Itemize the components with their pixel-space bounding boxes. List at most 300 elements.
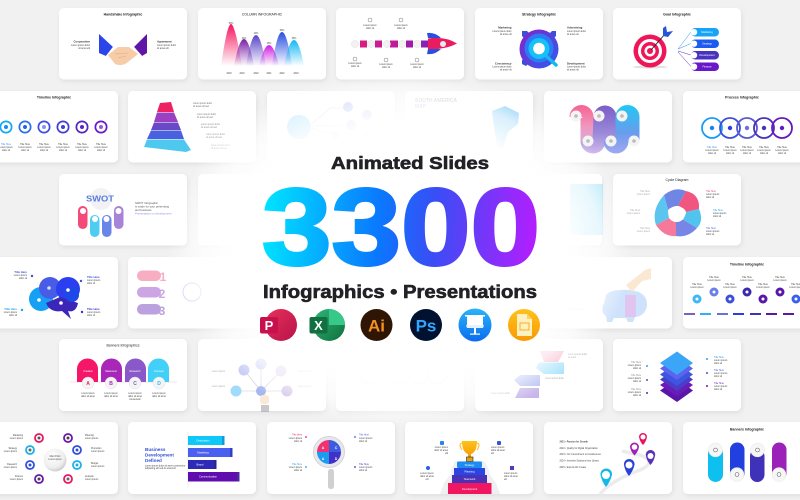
- panel: rocket timeline: [336, 8, 464, 80]
- panel: magnifier infographic: dolor sit: [359, 440, 367, 443]
- icon row: [260, 308, 540, 342]
- panel: banners infographic: D: [157, 381, 161, 387]
- panel: roadmap pins: [544, 422, 672, 494]
- panel: pyramid infographic: Lorem ipsum dolor: [193, 102, 212, 105]
- panel: banners infographic: Lorem ipsum: [104, 392, 118, 395]
- panel: trophy stairs: elit: [491, 452, 494, 455]
- panel: cycle diagram: [613, 174, 741, 246]
- panel: handshake infographic: sit amet elit: [157, 47, 169, 50]
- panel: strategy infographic: Lorem ipsum dolor: [567, 66, 586, 68]
- panel: radial ball infographic: Lorem ipsum: [4, 450, 17, 453]
- panel: process infographic: Lorem ipsum: [757, 149, 771, 152]
- panel: rocket timeline: dolor sit: [351, 65, 359, 68]
- panel: layers infographic: Title Here: [714, 356, 725, 359]
- panel: radial ball infographic: Lorem ipsum: [10, 478, 23, 481]
- panel: banners infographic: dolor sit amet: [104, 395, 118, 398]
- panel: south america map: MAP: [415, 104, 427, 110]
- panel: banners infographic: Lorem ipsum: [152, 392, 166, 395]
- panel: banners infographic: Banners Infographics: [106, 344, 140, 348]
- panel: column infographic: [198, 8, 326, 80]
- icon: Photoshop: [410, 309, 442, 341]
- panel: timeline infographic right: Timeline Infographic: [730, 262, 764, 266]
- panel: trophy stairs: dolor sit amet: [491, 449, 505, 452]
- panel: timeline infographic right: Title Here: [742, 276, 753, 279]
- panel: column infographic: 2022: [279, 73, 285, 75]
- panel: rocket timeline: Lorem ipsum: [394, 24, 408, 27]
- panel: banners infographic: Lorem ipsum: [128, 392, 142, 395]
- panel: trophy stairs: dolor sit amet: [434, 449, 448, 452]
- panel: banners infographic: dolor sit amet: [81, 395, 95, 398]
- panel: banners infographic: [59, 339, 187, 411]
- panel: column infographic: 35%: [292, 38, 296, 40]
- panel: pyramid infographic: Lorem ipsum dolor: [211, 144, 230, 147]
- panel: arrows infographic: Lorem ipsum dolor: [491, 392, 510, 395]
- panel: timeline infographic left: Lorem ipsum: [94, 146, 108, 149]
- panel: radial ball infographic: Lorem ipsum: [85, 437, 98, 440]
- panel: radial ball infographic: Lorem ipsum: [10, 437, 23, 440]
- panel: banners infographic: dolor sit amet: [152, 395, 166, 398]
- panel: network diagram: [267, 91, 395, 162]
- panel: timeline infographic left: dolor sit: [97, 149, 105, 152]
- panel: strategy infographic: Advertising: [567, 26, 583, 30]
- panel: magnifier infographic: Lorem ipsum: [359, 466, 372, 469]
- panel: brain infographic: Lorem ipsum: [87, 279, 100, 282]
- panel: strategy infographic: Consistency: [495, 62, 512, 66]
- panel: goal infographic: Development: [699, 53, 715, 57]
- panel: strategy infographic: Marketing: [498, 26, 512, 30]
- panel: timeline infographic left: dolor sit: [2, 149, 10, 152]
- panel: trophy stairs: Teamwork: [464, 477, 476, 481]
- panel: rocket timeline: dolor sit: [397, 27, 405, 30]
- panel: SWOT: and business: [135, 208, 152, 212]
- panel: timeline infographic right: Title Here: [725, 283, 736, 286]
- big number 3300: 3300: [262, 166, 540, 288]
- panel: business development: Defined: [145, 458, 162, 463]
- panel: radial ball infographic: Promotion: [91, 447, 102, 450]
- panel: strategy infographic: sit amet elit: [500, 68, 512, 72]
- panel: magnifier infographic: A: [322, 446, 325, 450]
- panel: banners infographic: C: [133, 381, 137, 387]
- panel: magnifier infographic: C: [335, 446, 338, 450]
- panel: strategy infographic: sit amet elit: [567, 68, 579, 72]
- panel: timeline infographic right: Lorem ipsum: [723, 286, 737, 289]
- panel: trophy stairs: Lorem ipsum: [504, 472, 517, 475]
- panel: cycle diagram: dolor sit: [706, 233, 714, 236]
- panel: trophy stairs: [405, 422, 533, 494]
- panel: timeline infographic left: Lorem ipsum: [56, 146, 70, 149]
- panel: faded ring chain: [336, 339, 464, 411]
- panel: timeline infographic left: Title Here: [58, 143, 69, 146]
- panel: layers infographic: Lorem ipsum: [714, 359, 727, 362]
- panel: pyramid infographic: Lorem ipsum dolor: [201, 123, 220, 126]
- panel: business development: Development: [145, 452, 174, 458]
- panel: radial ball infographic: Planning: [85, 435, 95, 437]
- panel: banners infographic: Research: [129, 369, 141, 373]
- panel: process infographic: Title Here: [707, 146, 718, 149]
- panel: radial ball infographic: Finance: [15, 476, 24, 478]
- panel: radial ball infographic: [0, 422, 118, 494]
- panel: brain infographic: [0, 257, 118, 328]
- panel: banners infographic: Statement: [105, 369, 117, 373]
- panel: trophy stairs: Lorem ipsum: [420, 472, 434, 475]
- panel: banners infographic: dolor sit amet: [128, 395, 142, 398]
- panel: cycle diagram: Title Here: [706, 227, 717, 230]
- panel: piggy bank: [544, 257, 672, 328]
- panel: trophy stairs: elit: [504, 478, 507, 481]
- icon: Excel: [310, 309, 345, 341]
- panel: process infographic: Process Infographic: [725, 96, 759, 100]
- panel: rocket timeline: dolor sit: [382, 66, 390, 69]
- panel: SWOT: [59, 174, 187, 246]
- panel: numbered list: 2: [159, 287, 166, 301]
- panel: timeline infographic left: dolor sit: [21, 149, 29, 152]
- panel: column infographic: 2021: [266, 73, 272, 75]
- panel: column infographic: 2020: [253, 73, 259, 75]
- panel: rocket timeline: dolor sit: [413, 66, 421, 69]
- panel: trophy stairs: Strategy: [465, 463, 475, 467]
- panel: layers infographic: [613, 339, 741, 411]
- panel: pyramid infographic: sit amet elit sed: [206, 136, 223, 139]
- panel: strategy infographic: Development: [567, 62, 585, 66]
- icon: Photoshop: Ps: [416, 316, 436, 336]
- panel: process infographic: dolor sit: [760, 152, 768, 155]
- panel: SWOT: SWOT: [86, 194, 114, 204]
- panel: trophy stairs: elit: [426, 478, 429, 481]
- panel: magnifier infographic: Title Here: [292, 463, 303, 466]
- heading: Animated Slides: Animated Slides: [331, 153, 489, 173]
- central white glow: [168, 72, 632, 428]
- panel: numbered list: 3: [159, 304, 166, 318]
- panel: handshake infographic: Agreement: [157, 40, 172, 44]
- panel: banners infographic: Concept: [154, 369, 164, 373]
- panel: strategy infographic: [475, 8, 603, 80]
- panel: cycle diagram: Lorem ipsum: [706, 193, 719, 196]
- panel: radial ball infographic: Budget: [91, 462, 99, 465]
- panel: cycle diagram: Lorem ipsum: [706, 230, 719, 233]
- panel: magnifier infographic: [267, 422, 395, 494]
- panel: column infographic: 25%: [267, 43, 271, 45]
- panel: strategy infographic: Lorem ipsum dolor: [492, 30, 512, 33]
- panel: banners infographic: Lorem ipsum: [81, 392, 95, 395]
- panel: brain infographic: Title Here: [14, 270, 27, 274]
- panel: goal infographic: Finance: [702, 64, 712, 68]
- panel: goal infographic: Goal Infographic: [663, 12, 691, 16]
- panel: brain infographic: Title Here: [87, 307, 100, 311]
- panel: timeline infographic left: Timeline Infographic: [37, 96, 71, 100]
- panel: layers infographic: Lorem ipsum: [714, 385, 727, 388]
- panel: pyramid infographic: Lorem ipsum dolor: [206, 133, 225, 136]
- panel: goal infographic: Strategy: [702, 42, 713, 46]
- panel: south america map: [405, 91, 533, 162]
- panel: cycle diagram: Lorem ipsum: [637, 193, 650, 196]
- panel: business development: Communication: [199, 474, 218, 478]
- panel: radial ball infographic: Research: [7, 463, 18, 466]
- panel: layers infographic: Lorem ipsum: [714, 372, 727, 375]
- icon: PowerPoint: P: [265, 318, 274, 333]
- panel: process infographic: Lorem ipsum: [740, 149, 754, 152]
- panel: rocket timeline: Lorem ipsum: [363, 24, 377, 27]
- panel: banners infographic: B: [109, 381, 113, 387]
- panel: column infographic: 2018: [226, 73, 232, 75]
- panel: timeline infographic left: Lorem ipsum: [18, 146, 32, 149]
- panel: process infographic: dolor sit: [743, 152, 751, 155]
- panel: process infographic: dolor sit: [726, 152, 734, 155]
- panel: strategy infographic: sit amet elit: [567, 33, 579, 36]
- panel: cycle diagram: Lorem ipsum: [627, 212, 640, 215]
- panel: process infographic: Title Here: [777, 146, 788, 149]
- panel: timeline infographic left: dolor sit: [40, 149, 48, 152]
- panel: business development: Description: [197, 438, 210, 442]
- panel: brain infographic: dolor sit: [87, 282, 95, 285]
- panel: numbered list: [128, 257, 256, 328]
- panel: magnifier infographic: Lorem ipsum: [289, 437, 302, 440]
- panel: column infographic: 32%: [242, 38, 246, 40]
- panel: blank faded slide: [198, 174, 326, 246]
- panel: hand network: [198, 339, 326, 412]
- panel: rocket timeline: Lorem ipsum: [410, 63, 424, 66]
- panel: strategy infographic: sit amet elit: [500, 33, 512, 36]
- panel: radial ball infographic: Strategy: [8, 447, 18, 450]
- panel: timeline infographic left: Title Here: [77, 143, 88, 146]
- panel: timeline infographic left: Lorem ipsum: [75, 146, 89, 149]
- icon: Illustrator: [360, 309, 392, 341]
- panel: roadmap pins: 2021 • Passion for Growth: [560, 440, 588, 444]
- panel: banners infographic right: [683, 422, 800, 494]
- panel: business development: [128, 422, 256, 494]
- panel: process infographic: Title Here: [742, 146, 753, 149]
- panel: roadmap pins: 2022 • Quality for Digital Organization: [560, 447, 599, 450]
- panel: layers infographic: Title Here: [631, 374, 642, 377]
- panel: arrows infographic: sit amet: [568, 356, 576, 359]
- panel: trophy stairs: elit: [445, 452, 448, 455]
- panel: column infographic: 50%: [280, 30, 284, 32]
- panel: banners infographic right: Banners Infographic: [730, 428, 764, 432]
- panel: handshake infographic: Lorem ipsum dolor: [71, 44, 90, 47]
- panel: trophy stairs: Planning: [464, 470, 475, 474]
- panel: timeline infographic right: Lorem ipsum: [740, 279, 754, 282]
- panel: cycle diagram: dolor sit: [706, 196, 714, 199]
- panel: hand network: Lorem ipsum: [298, 370, 311, 373]
- panel: cycle diagram: dolor sit: [713, 215, 721, 218]
- panel: timeline infographic right: Title Here: [709, 276, 720, 279]
- panel: process infographic: Lorem ipsum: [705, 149, 719, 152]
- panel: process infographic: dolor sit: [778, 152, 786, 155]
- panel: layers infographic: Title Here: [714, 369, 725, 372]
- panel: brain infographic: dolor sit: [19, 277, 27, 280]
- panel: timeline infographic left: Lorem ipsum: [37, 146, 51, 149]
- panel: cycle diagram: Title Here: [706, 190, 717, 193]
- panel: timeline infographic left: Title Here: [20, 143, 31, 146]
- panel: magnifier infographic: dolor sit: [294, 440, 302, 443]
- icon: Excel: X: [314, 318, 323, 333]
- panel: radial ball infographic: Lorem ipsum: [85, 478, 98, 481]
- panel: timeline infographic left: Title Here: [39, 143, 50, 146]
- panel: goal infographic: Marketing: [701, 30, 713, 34]
- panel: timeline infographic right: Lorem ipsum: [773, 279, 787, 282]
- panel: layers infographic: dolor sit: [714, 362, 722, 365]
- panel: radial ball infographic: Lorem ipsum: [91, 450, 104, 453]
- panel: handshake infographic: Lorem ipsum dolor: [157, 44, 176, 47]
- panel: rocket timeline: Lorem ipsum: [379, 63, 393, 66]
- panel: hand network: Lorem ipsum: [298, 385, 311, 388]
- panel: cycle diagram: Title Here: [640, 190, 651, 193]
- panel: arrows infographic: Lorem ipsum dolor: [545, 377, 564, 380]
- panel: handshake infographic: Cooperation: [74, 40, 90, 44]
- panel: layers infographic: Lorem ipsum: [628, 364, 641, 367]
- panel: arrows infographic: Lorem ipsum dolor: [568, 353, 587, 356]
- panel: brain infographic: Lorem ipsum: [87, 311, 100, 314]
- panel: process infographic: dolor sit: [708, 152, 716, 155]
- panel: numbered list: 1: [160, 270, 167, 284]
- panel: timeline infographic left: dolor sit: [78, 149, 86, 152]
- panel: business development: Marketing: [197, 450, 209, 454]
- panel: handshake infographic: sit amet elit: [78, 47, 90, 50]
- panel: trophy stairs: Lorem ipsum: [491, 446, 504, 449]
- panel: pyramid infographic: [128, 91, 256, 162]
- panel: roadmap pins: 2024 • Inventive Solutions from Library: [560, 460, 600, 462]
- panel: process infographic: [683, 91, 800, 162]
- panel: radial ball infographic: Main Point: [50, 455, 61, 458]
- panel: faded bar slide: [544, 174, 603, 246]
- panel: hand network: Lorem ipsum: [212, 370, 225, 373]
- panel: piggy bank: Lorem ipsum dolor: [565, 308, 584, 311]
- panel: strategy infographic: Lorem ipsum dolor: [567, 30, 586, 33]
- panel: layers infographic: Title Here: [714, 382, 725, 385]
- panel: roadmap pins: 2023 • Our Commitment to Creativeness: [560, 453, 602, 456]
- panel: timeline infographic left: Title Here: [1, 143, 12, 146]
- panel: magnifier infographic: dolor sit: [294, 469, 302, 472]
- panel: radial ball infographic: Lorem ipsum: [4, 466, 17, 469]
- panel: layers infographic: dolor sit: [714, 375, 722, 378]
- panel: column infographic: 40%: [254, 33, 258, 35]
- panel: cycle diagram: Lorem ipsum: [713, 212, 726, 215]
- panel: timeline infographic right: Title Here: [692, 283, 703, 286]
- panel: timeline infographic right: Title Here: [758, 283, 769, 286]
- panel: column infographic: 2023: [293, 73, 299, 75]
- icon: Illustrator: Ai: [368, 316, 385, 336]
- panel: magnifier infographic: D: [335, 457, 338, 461]
- panel: timeline infographic right: Lorem ipsum: [707, 279, 721, 282]
- panel: column infographic: COLUMN INFOGRAPHIC: [242, 12, 283, 16]
- panel: magnifier infographic: Title Here: [359, 463, 370, 466]
- panel: layers infographic: Lorem ipsum: [628, 391, 641, 394]
- panel: layers infographic: dolor sit: [633, 380, 641, 383]
- panel: cycle diagram: Title Here: [630, 209, 641, 212]
- panel: timeline infographic left: [0, 91, 118, 162]
- icon: PowerPoint: [260, 309, 297, 341]
- panel: goal infographic: [613, 8, 741, 80]
- panel: process infographic: Title Here: [725, 146, 736, 149]
- panel: banners infographic: A: [86, 381, 90, 387]
- panel: process infographic: Lorem ipsum: [723, 149, 737, 152]
- panel: timeline infographic left: dolor sit: [59, 149, 67, 152]
- panel: handshake infographic: Handshake Infographic: [104, 12, 142, 16]
- panel: trophy stairs: dolor sit amet: [420, 475, 434, 478]
- panel: timeline infographic right: Lorem ipsum: [756, 286, 770, 289]
- panel: magnifier infographic: dolor sit: [359, 469, 367, 472]
- panel: layers infographic: dolor sit: [714, 388, 722, 391]
- panel: trophy stairs: Development: [462, 487, 477, 491]
- panel: cycle diagram: Lorem ipsum: [637, 230, 650, 233]
- panel: layers infographic: Title Here: [631, 361, 642, 364]
- panel: magnifier infographic: Lorem ipsum: [289, 466, 302, 469]
- panel: SWOT: Presentation on development: [135, 212, 172, 216]
- panel: roadmap pins: 2025 • Experts We Create: [560, 466, 587, 469]
- panel: SWOT: is made for your presenting: [135, 204, 169, 208]
- panel: magnifier infographic: A: [322, 457, 325, 461]
- panel: brain infographic: dolor sit: [9, 314, 17, 317]
- panel: brain infographic: Lorem ipsum: [14, 274, 27, 277]
- panel: trophy stairs: Lorem ipsum: [435, 446, 448, 449]
- panel: radial ball infographic: Lorem ipsum: [91, 465, 104, 468]
- panel: timeline infographic right: Lorem ipsum: [690, 286, 704, 289]
- panel: pyramid infographic: sit amet elit sed: [193, 105, 210, 108]
- panel: brain infographic: Title Here: [4, 307, 17, 311]
- panel: process infographic: Lorem ipsum: [775, 149, 789, 152]
- panel: timeline infographic left: Title Here: [96, 143, 107, 146]
- panel: cycle diagram: Title Here: [640, 227, 651, 230]
- panel: trophy stairs: dolor sit amet: [504, 475, 518, 478]
- panel: pyramid infographic: sit amet elit sed: [201, 126, 218, 129]
- panel: magnifier infographic: Title Here: [359, 434, 370, 436]
- panel: south america map: SOUTH AMERICA: [415, 98, 457, 104]
- panel: SWOT: SWOT Infographic: [135, 201, 159, 205]
- panel: strategy infographic: Lorem ipsum dolor: [492, 66, 512, 68]
- panel: pyramid infographic: Lorem ipsum dolor: [197, 113, 216, 116]
- panel: column infographic: 2019: [239, 73, 245, 75]
- panel: brain infographic: Lorem ipsum: [4, 311, 17, 314]
- panel: process infographic: Title Here: [759, 146, 770, 149]
- icon: Keynote: [458, 308, 492, 342]
- panel: layers infographic: dolor sit: [633, 367, 641, 370]
- panel: layers infographic: Lorem ipsum: [628, 377, 641, 380]
- panel: rocket timeline: Lorem ipsum: [348, 62, 362, 65]
- panel: pyramid infographic: sit amet elit sed: [211, 147, 228, 150]
- panel: timeline infographic right: Title Here: [775, 276, 786, 279]
- panel: business development: adipiscing elit sed do eiusmod: [145, 467, 176, 470]
- panel: wave ribbon infographic: [544, 91, 672, 162]
- panel: cycle diagram: Title Here: [713, 209, 724, 212]
- panel: banners infographic: consectetur: [129, 398, 141, 401]
- panel: layers infographic: Title Here: [631, 388, 642, 391]
- panel: radial ball infographic: Lorem ipsum: [48, 458, 62, 461]
- panel: radial ball infographic: Marketing: [13, 434, 24, 437]
- panel: blank faded slide centre right: [405, 257, 533, 328]
- panel: cycle diagram: Cycle Diagram: [666, 178, 689, 182]
- panel: pyramid infographic: sit amet elit sed: [197, 116, 214, 119]
- subtitle: Infographics • Presentations: [263, 281, 537, 302]
- panel: blank faded slide centre: [267, 257, 395, 328]
- panel: arrows infographic: [475, 339, 603, 411]
- panel: business development: Business: [145, 447, 166, 452]
- panel: hand network: Lorem ipsum: [212, 385, 225, 388]
- panel: timeline infographic right: [683, 257, 800, 328]
- panel: radial ball infographic: Analysis: [85, 475, 94, 478]
- panel: magnifier infographic: Title Here: [292, 434, 303, 436]
- panel: layers infographic: dolor sit: [633, 394, 641, 397]
- panel: handshake infographic: [59, 8, 187, 80]
- panel: business development: Lorem ipsum dolor sit amet consectetur: [145, 464, 185, 468]
- panel: rocket timeline: dolor sit: [366, 27, 374, 30]
- panel: banners infographic: Creative: [83, 369, 93, 373]
- panel: strategy infographic: Strategy Infographic: [522, 12, 556, 16]
- panel: brain infographic: Title Here: [87, 275, 100, 279]
- panel: business development: Brand: [197, 462, 204, 466]
- icon: Google Slides: [508, 309, 540, 341]
- panel: magnifier infographic: Lorem ipsum: [359, 437, 372, 440]
- panel: column infographic: 50%: [229, 23, 233, 25]
- panel: brain infographic: dolor sit: [87, 314, 95, 317]
